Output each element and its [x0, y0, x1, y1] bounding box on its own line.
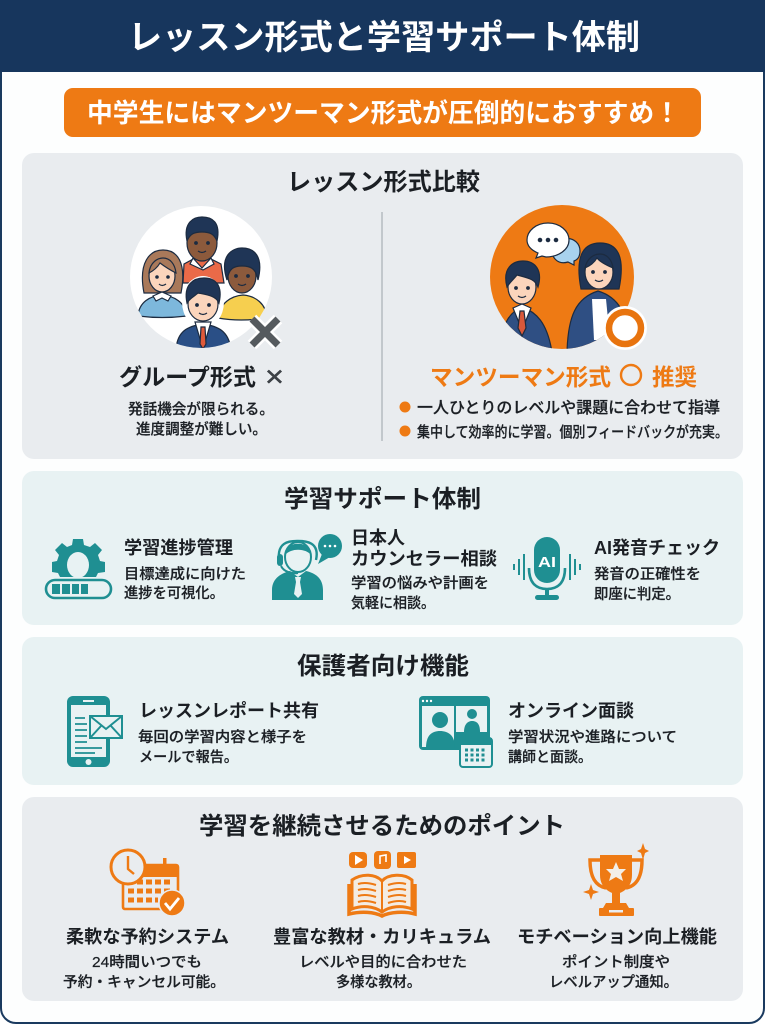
text: progress management: 進捗を可視化。	[124, 585, 224, 602]
text: progress management: 学習進捗管理	[124, 537, 233, 558]
icon: group of students	[130, 206, 278, 352]
panel: points for continuing	[22, 797, 743, 1001]
icon: gear with progress bar	[46, 539, 111, 598]
text: rich materials: レベルや目的に合わせた	[299, 954, 467, 971]
text: group format	[119, 364, 285, 438]
text: online meeting	[508, 701, 677, 766]
text: group format: 発話機会が限られる。	[128, 400, 274, 418]
icon: counselor with headset	[272, 534, 342, 600]
text: motivation features: ポイント制度や	[562, 954, 670, 971]
text: progress management: 目標達成に向けた	[124, 566, 246, 583]
text: lesson report: 毎回の学習内容と様子を	[138, 729, 307, 746]
text: online meeting: 講師と面談。	[508, 748, 592, 766]
text: lesson report	[138, 700, 319, 766]
text: motivation features	[517, 927, 717, 991]
panel: parent features	[22, 637, 743, 785]
panel: lesson format comparison	[22, 153, 743, 459]
text: AI pronunciation check	[594, 538, 720, 603]
icon: open book with media	[349, 851, 416, 916]
text: AI pronunciation check: 発音の正確性を	[594, 566, 701, 583]
text: group format: ✕	[264, 364, 285, 390]
text: progress management	[124, 537, 246, 602]
title banner: レッスン形式と学習サポート体制	[128, 19, 640, 57]
icon: clock and calendar	[111, 850, 185, 916]
text: group format: グループ形式	[119, 364, 256, 390]
text: flexible booking	[63, 927, 229, 991]
heading: points for continuing: 学習を継続させるためのポイント	[199, 813, 565, 840]
icon: circle mark	[603, 306, 647, 350]
icon: AI microphone	[514, 537, 580, 600]
text: online meeting: オンライン面談	[508, 701, 634, 721]
text: group format: 進度調整が難しい。	[136, 420, 267, 438]
icon: speech bubbles	[527, 223, 580, 265]
text: AI pronunciation check: 即座に判定。	[594, 586, 680, 603]
callout: recommendation: 中学生にはマンツーマン形式が圧倒的におすすめ！	[87, 98, 680, 128]
text: Japanese counselor: カウンセラー相談	[351, 549, 497, 569]
text: rich materials: 多様な教材。	[336, 973, 421, 991]
text: rich materials: 豊富な教材・カリキュラム	[273, 927, 491, 947]
text: flexible booking: 予約・キャンセル可能。	[63, 974, 225, 991]
text: flexible booking: 柔軟な予約システム	[66, 927, 229, 947]
heading: comparison: レッスン形式比較	[287, 169, 480, 196]
heading: learning support: 学習サポート体制	[284, 486, 481, 513]
text: one-to-one format: マンツーマン形式	[430, 364, 611, 390]
icon: phone with mail	[67, 696, 122, 767]
icon: cross mark	[252, 319, 278, 345]
icon: one-to-one lesson	[490, 205, 647, 352]
title banner	[0, 0, 765, 72]
text: one-to-one format	[400, 364, 728, 441]
text: lesson report: メールで報告。	[139, 749, 238, 766]
text: Japanese counselor: 気軽に相談。	[351, 595, 435, 612]
text: one-to-one format: 一人ひとりのレベルや課題に合わせて指導	[417, 399, 720, 417]
text: motivation features: レベルアップ通知。	[549, 974, 678, 991]
text: motivation features: モチベーション向上機能	[517, 927, 717, 947]
text: rich materials	[273, 927, 491, 991]
icon: online meeting	[419, 696, 492, 767]
text: one-to-one format: 推奨	[652, 364, 697, 390]
text: flexible booking: 24時間いつでも	[92, 954, 202, 971]
text: AI pronunciation check: AI発音チェック	[594, 538, 720, 558]
panel: learning support	[22, 471, 743, 625]
text: Japanese counselor	[351, 528, 497, 612]
callout: recommendation	[64, 88, 701, 137]
text: Japanese counselor: 学習の悩みや計画を	[351, 575, 489, 592]
text: lesson report: レッスンレポート共有	[139, 700, 319, 721]
icon: trophy	[583, 843, 649, 916]
icon: AI microphone: AI	[538, 554, 556, 571]
text: online meeting: 学習状況や進路について	[508, 729, 677, 746]
text: Japanese counselor: 日本人	[351, 528, 405, 548]
heading: parent features: 保護者向け機能	[297, 653, 469, 680]
